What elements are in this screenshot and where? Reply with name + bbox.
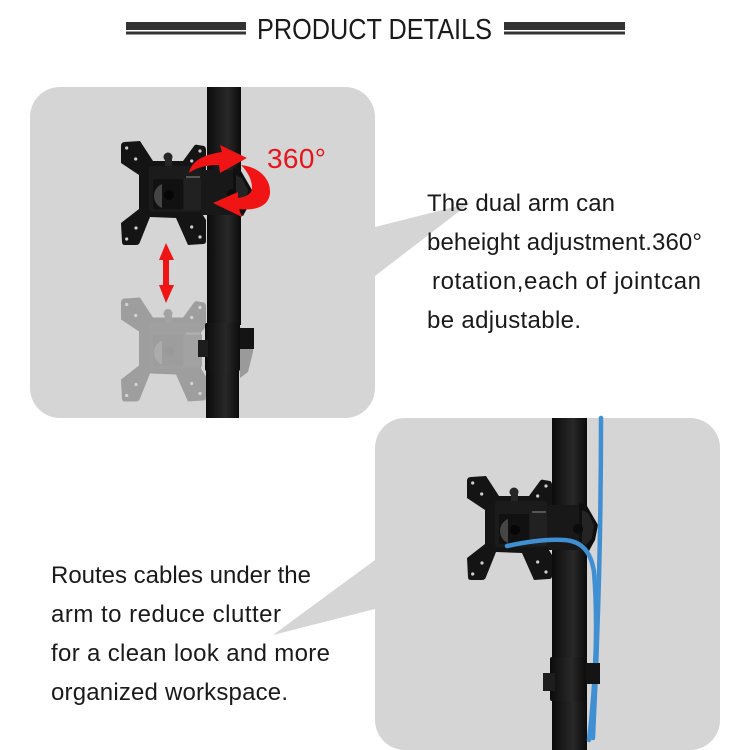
- text block: cable routing description: for a clean look and more: [51, 640, 330, 667]
- bracket: [467, 476, 598, 580]
- text block: cable routing description: arm to reduce clutter: [51, 601, 281, 628]
- monitor pole: [198, 87, 254, 418]
- title text: PRODUCT DETAILS: [257, 14, 492, 46]
- blue cables: [507, 418, 601, 740]
- rotation arrows: [189, 145, 270, 217]
- text block: adjustment description: rotation,each of jointcan: [432, 268, 701, 295]
- text block: adjustment description: The dual arm can: [427, 190, 615, 217]
- text block: adjustment description: [427, 190, 702, 334]
- left title rule: [126, 22, 246, 34]
- vertical travel arrow: [159, 243, 174, 303]
- text block: cable routing description: [51, 562, 330, 706]
- title: [126, 14, 625, 46]
- rotation label: 360°: [267, 143, 326, 174]
- text block: cable routing description: organized workspace.: [51, 679, 288, 706]
- ghost clamp: [238, 327, 253, 378]
- panel background with callout pointer: [273, 418, 720, 750]
- text block: adjustment description: beheight adjustment.360°: [427, 229, 702, 256]
- panel background with callout pointer: [30, 87, 470, 418]
- panel: height adjustment and rotation: [30, 87, 470, 418]
- cable clip: [586, 663, 600, 684]
- faded lower bracket: [121, 298, 206, 402]
- text block: cable routing description: Routes cables under the: [51, 562, 311, 589]
- right title rule: [504, 22, 625, 34]
- text block: adjustment description: be adjustable.: [427, 307, 581, 334]
- upper bracket: [121, 141, 252, 245]
- monitor pole: [543, 418, 587, 750]
- panel: cable management: [273, 418, 720, 750]
